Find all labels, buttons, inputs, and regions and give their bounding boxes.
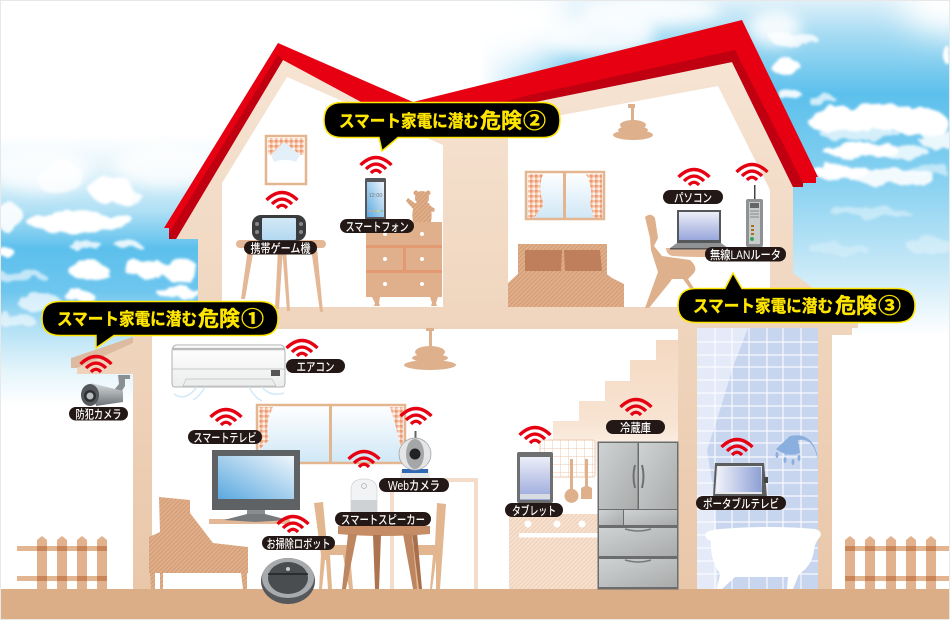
callout: danger 3: 危険 bbox=[835, 295, 877, 318]
label: スマートフォン bbox=[346, 220, 408, 234]
label: Webカメラ bbox=[388, 479, 440, 493]
icon: refrigerator bbox=[598, 442, 678, 590]
roof bbox=[164, 20, 818, 239]
wifi signal bbox=[400, 408, 432, 424]
wifi signal bbox=[286, 340, 318, 356]
utensil: ladle bbox=[564, 459, 578, 503]
label: 携帯ゲーム機 bbox=[250, 240, 310, 256]
device: portable TV bbox=[696, 440, 786, 511]
desk chair bbox=[645, 215, 695, 308]
callout: danger 2: スマート家電に潜む bbox=[339, 111, 479, 131]
fence: right bbox=[845, 536, 949, 589]
device: smart speaker bbox=[335, 452, 431, 527]
staircase bbox=[553, 340, 678, 480]
ceiling lamp: upper bbox=[613, 104, 653, 140]
porch eave bbox=[71, 337, 133, 368]
wifi signal bbox=[266, 192, 298, 208]
callout: danger 2 bbox=[324, 102, 560, 151]
wifi signal bbox=[620, 400, 652, 415]
roof shadow right bbox=[480, 50, 803, 187]
icon: smartphone: 12:00 bbox=[369, 193, 382, 199]
chair left bbox=[314, 502, 353, 589]
device: personal computer bbox=[663, 170, 728, 250]
callout: danger 1: ① bbox=[241, 308, 264, 331]
icon: air conditioner bbox=[172, 345, 285, 401]
wifi signal bbox=[736, 164, 768, 180]
device: smartphone bbox=[340, 158, 414, 234]
device: smart TV bbox=[188, 410, 300, 524]
device: handheld game console bbox=[244, 192, 317, 256]
device: air conditioner bbox=[172, 340, 345, 401]
icon: speaker bbox=[351, 479, 377, 513]
sky: right bbox=[440, 0, 950, 335]
ground floor room bbox=[152, 329, 678, 589]
ceiling lamp: lower bbox=[404, 328, 456, 370]
device: robot vacuum bbox=[261, 516, 335, 604]
wifi signal bbox=[678, 170, 710, 185]
label: スマートテレビ bbox=[194, 431, 256, 445]
icon: game console bbox=[252, 215, 306, 241]
back wall frame bbox=[392, 480, 476, 589]
bathtub bbox=[705, 527, 821, 589]
icon: television bbox=[209, 450, 300, 524]
shower curtain bbox=[697, 328, 748, 589]
tiled wall bbox=[697, 328, 818, 589]
callout: danger 3: ③ bbox=[878, 295, 901, 318]
right exterior bbox=[832, 336, 950, 589]
armchair bbox=[149, 497, 248, 589]
device: tablet bbox=[505, 428, 563, 518]
callout: danger 2: ② bbox=[523, 110, 546, 133]
icon: web camera bbox=[399, 431, 431, 478]
teddy bear bbox=[406, 190, 435, 222]
device: web camera bbox=[379, 408, 449, 493]
label: パソコン bbox=[674, 191, 712, 205]
callout: danger 1 bbox=[42, 302, 278, 348]
table bbox=[338, 526, 430, 589]
icon: router bbox=[746, 185, 763, 247]
callout: danger 3 bbox=[678, 273, 915, 322]
side table: upper bbox=[236, 240, 326, 312]
roof shadow left bbox=[169, 55, 283, 239]
chair right bbox=[411, 503, 446, 589]
callout: danger 1: スマート家電に潜む bbox=[57, 309, 197, 329]
device: refrigerator bbox=[598, 400, 678, 590]
device: wireless LAN router bbox=[705, 164, 786, 262]
label: 防犯カメラ bbox=[76, 408, 122, 422]
device: security camera bbox=[69, 356, 130, 422]
label: 無線LANルータ bbox=[710, 247, 781, 262]
icon: camera bbox=[81, 375, 130, 406]
wifi signal bbox=[348, 452, 380, 467]
wifi signal bbox=[278, 516, 308, 532]
icon: robot vacuum bbox=[261, 558, 315, 604]
callout: danger 2: 危険 bbox=[480, 110, 522, 133]
counter bbox=[509, 514, 598, 589]
wifi signal bbox=[722, 440, 752, 455]
shower head bbox=[776, 435, 818, 465]
utensil: spatula bbox=[581, 459, 592, 499]
wifi signal bbox=[80, 356, 112, 372]
ground bbox=[0, 589, 950, 619]
desk bbox=[666, 248, 770, 257]
label: タブレット bbox=[512, 503, 556, 518]
sky: left bbox=[0, 135, 280, 405]
fence: left bbox=[17, 536, 107, 589]
label: スマートスピーカー bbox=[341, 513, 425, 527]
wifi signal bbox=[360, 158, 392, 173]
bed bbox=[508, 244, 624, 307]
kitchen bbox=[509, 440, 598, 589]
lower window bbox=[257, 405, 405, 463]
label bbox=[606, 420, 665, 435]
icon: portable television bbox=[713, 463, 768, 497]
label: 冷蔵庫 bbox=[620, 420, 651, 435]
wall body bbox=[71, 60, 858, 589]
label: お掃除ロボット bbox=[266, 536, 330, 551]
callout: danger 3: スマート家電に潜む bbox=[693, 296, 833, 316]
tile grout bbox=[697, 328, 818, 589]
upper right room bbox=[508, 86, 770, 307]
bathroom bbox=[697, 328, 821, 589]
upper right window bbox=[526, 172, 604, 219]
chest of drawers bbox=[366, 222, 442, 306]
upper left room bbox=[222, 77, 443, 307]
callout: danger 1: 危険 bbox=[198, 308, 240, 331]
wifi signal bbox=[210, 410, 242, 425]
table and chairs bbox=[314, 502, 446, 589]
icon: tablet bbox=[517, 452, 553, 503]
tile panel bbox=[540, 440, 595, 477]
label: ポータブルテレビ bbox=[703, 496, 779, 511]
label: エアコン bbox=[296, 360, 334, 374]
icon: laptop bbox=[670, 210, 728, 250]
wifi signal bbox=[520, 428, 550, 443]
upper left window bbox=[266, 136, 306, 184]
roof red band bbox=[164, 20, 818, 239]
